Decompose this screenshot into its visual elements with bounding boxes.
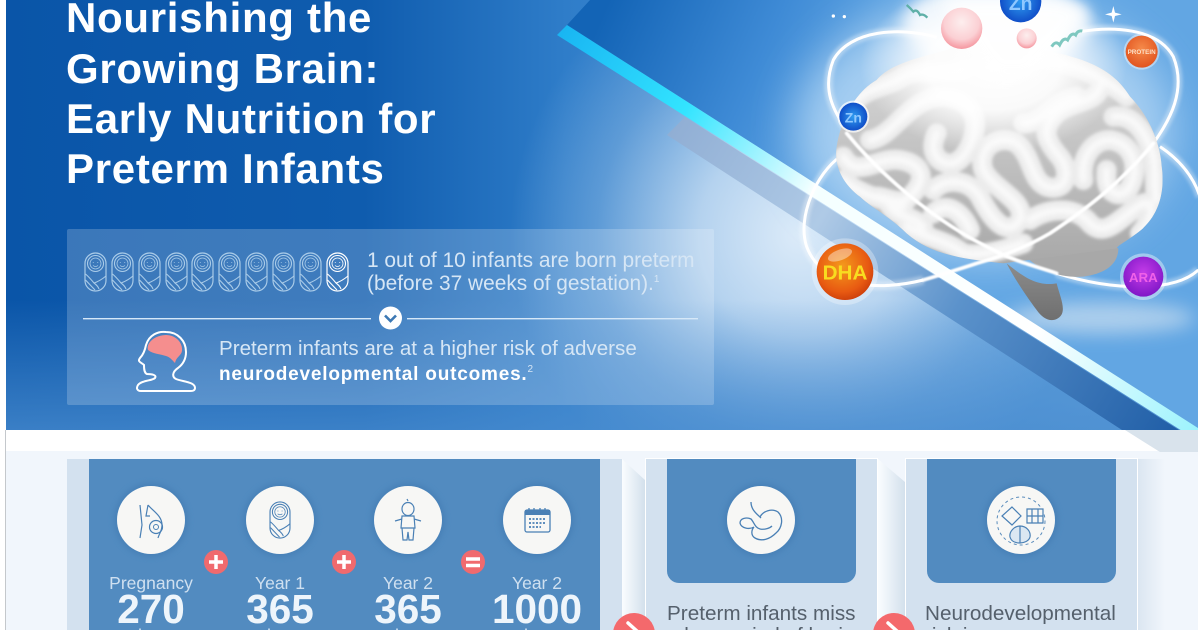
title: Preterm Infants — [66, 145, 385, 192]
panel: missed period — [646, 458, 905, 630]
text: one out of ten: (before 37 weeks of gestation). — [367, 272, 654, 295]
upper right triangle — [567, 0, 1198, 428]
labels and day counts: Year 2 — [383, 573, 433, 593]
nutrient: zinc: Zn — [845, 110, 862, 126]
diagonal band — [557, 25, 1198, 441]
icon: calendar — [500, 483, 574, 557]
text: one out of ten: 1 — [654, 274, 660, 285]
connector arrow 2 — [873, 613, 915, 630]
lower section background — [5, 430, 1198, 630]
orbit rings behind brain — [804, 29, 1200, 287]
icon: developmental domains — [984, 483, 1058, 557]
nutrient: protein: PROTEIN — [1128, 49, 1156, 56]
nutrient: zinc top — [1000, 0, 1041, 22]
hero banner — [6, 0, 1200, 441]
amino acid chain right — [1052, 31, 1082, 47]
nutrient: protein — [1124, 34, 1160, 70]
text: higher risk: neurodevelopmental outcomes. — [219, 364, 528, 385]
plus sign 2 — [332, 550, 356, 574]
icon: swaddled baby — [243, 483, 317, 557]
panel: neurodevelopmental — [906, 458, 1165, 630]
soft glow below brain — [1005, 302, 1195, 334]
title: Early Nutrition for — [66, 95, 436, 142]
nutrient: pink sphere — [941, 8, 982, 49]
nutrient: zinc — [837, 101, 869, 133]
labels and day counts: Year 1 — [255, 573, 305, 593]
nutrient: DHA: DHA — [823, 261, 867, 284]
plus sign 1 — [204, 550, 228, 574]
panel: preterm statistics — [67, 229, 714, 405]
soft glow behind brain — [795, 0, 1175, 260]
connector arrow 1 — [613, 613, 655, 630]
brain illustration with orbiting nutrients — [804, 0, 1200, 320]
icon: ten swaddled babies — [85, 253, 348, 291]
icon: pregnancy — [114, 483, 188, 557]
shadow strip under the diagonal band — [667, 117, 1190, 437]
labels and day counts — [109, 573, 582, 630]
icon: head with brain — [137, 332, 195, 391]
text: higher risk: Preterm infants are at a higher risk of adverse — [219, 337, 637, 360]
glow above the brain — [895, 0, 1098, 52]
nutrient: ARA — [1120, 253, 1167, 300]
orbit rings over brain — [847, 133, 1153, 280]
divider with chevron — [83, 306, 698, 330]
nutrient: small pink sphere — [1017, 28, 1037, 48]
title: Growing Brain: — [66, 45, 379, 92]
brain body — [836, 56, 1163, 264]
cerebellum — [1030, 248, 1118, 277]
sparkles — [832, 6, 1122, 23]
text: preterm infants miss: Preterm infants miss — [667, 602, 856, 625]
panel: first 1000 days — [67, 459, 645, 630]
labels and day counts: Pregnancy — [109, 573, 193, 593]
icon: fetus — [724, 483, 798, 557]
text: higher risk: 2 — [528, 364, 534, 375]
amino acid chain left — [907, 5, 927, 18]
icon: infant — [371, 483, 445, 557]
brain stem — [1007, 263, 1063, 320]
top light burst on brain — [866, 0, 1120, 142]
nutrient: DHA — [812, 238, 878, 305]
text: one out of ten: 1 out of 10 infants are born preterm — [367, 249, 694, 272]
text: neurodevelopmental: Neurodevelopmental — [925, 602, 1116, 625]
equals sign — [461, 550, 485, 574]
nutrient: ARA: ARA — [1129, 270, 1158, 285]
labels and day counts: Year 2 — [512, 573, 562, 593]
orbit ring glow — [804, 29, 1200, 287]
